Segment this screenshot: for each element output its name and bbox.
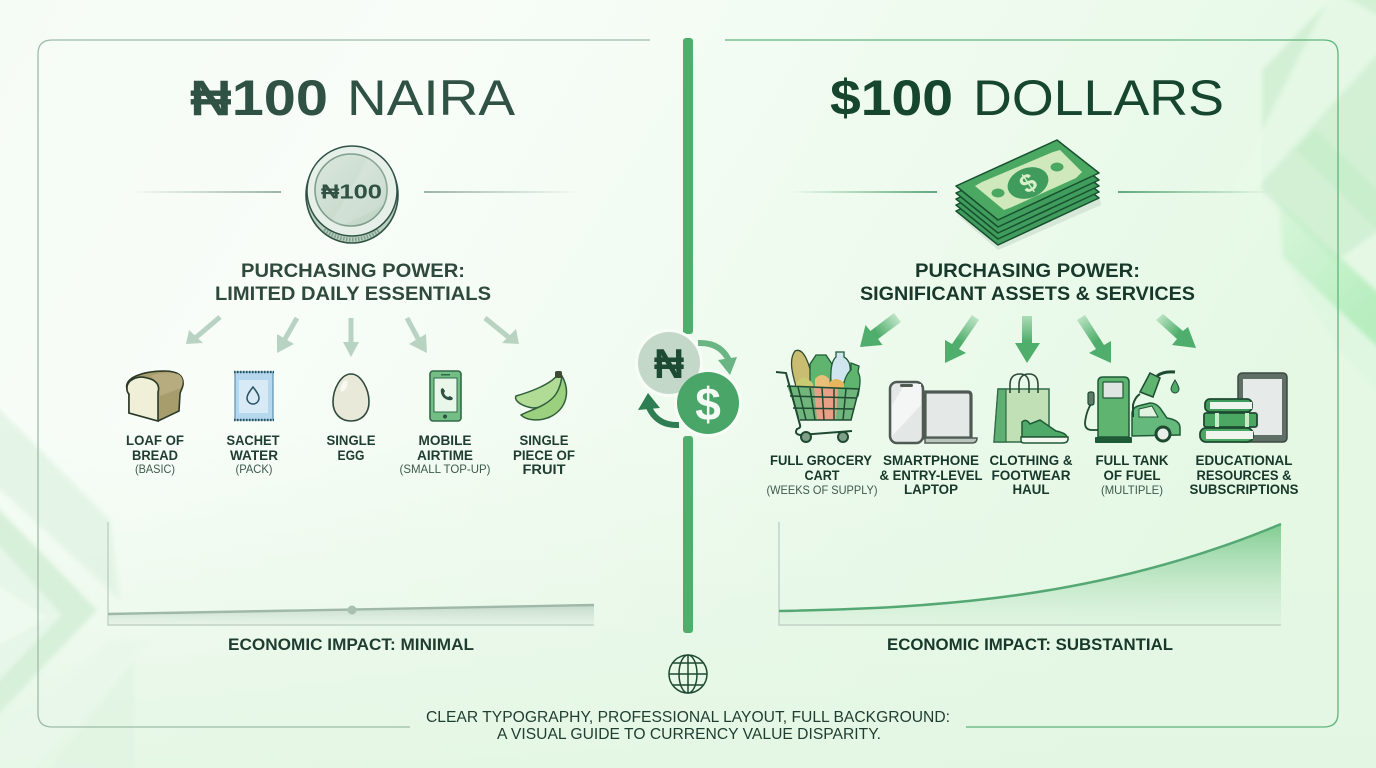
caption: economic impact substantial: ECONOMIC IMPACT: SUBSTANTIAL: [887, 635, 1173, 654]
item: single piece of fruit: [513, 371, 575, 477]
item: full tank of fuel: (MULTIPLE): [1101, 483, 1163, 497]
heading: purchasing power limited: LIMITED DAILY ESSENTIALS: [215, 283, 491, 305]
icon: naira coin: [306, 146, 398, 243]
item: full grocery cart: CART: [804, 468, 840, 483]
panel: dollars: [766, 70, 1298, 654]
item: clothing and footwear: HAUL: [1012, 482, 1050, 497]
panel frame: naira: [38, 40, 650, 727]
item: full grocery cart: (WEEKS OF SUPPLY): [766, 483, 878, 497]
item: loaf of bread: LOAF OF: [126, 433, 184, 448]
item: full tank of fuel: FULL TANK: [1096, 453, 1169, 468]
heading: purchasing power limited: PURCHASING POWER:: [241, 260, 465, 282]
icon: stack of dollar bills: [956, 140, 1101, 250]
item: sachet water: [226, 372, 280, 476]
item: smartphone and laptop: LAPTOP: [904, 482, 958, 497]
icon: currency exchange: ₦: [654, 340, 684, 387]
panel: naira: [108, 70, 594, 654]
footer text: [426, 709, 950, 743]
item: clothing and footwear: CLOTHING &: [990, 453, 1073, 468]
icon: currency exchange: $: [695, 378, 721, 430]
item: single egg: [326, 374, 376, 463]
caption: economic impact minimal: ECONOMIC IMPACT: MINIMAL: [228, 635, 474, 654]
item: full grocery cart: [766, 350, 878, 497]
item: smartphone and laptop: & ENTRY-LEVEL: [880, 468, 982, 483]
item: single piece of fruit: SINGLE: [520, 433, 568, 448]
item: mobile airtime: [400, 371, 490, 476]
item: educational resources: RESOURCES &: [1196, 468, 1292, 483]
coin divider lines: [130, 191, 578, 193]
arrows: naira items: [186, 317, 519, 357]
item: mobile airtime: AIRTIME: [417, 448, 473, 463]
item: single piece of fruit: FRUIT: [522, 462, 566, 477]
icon: stack of dollar bills: $: [1013, 166, 1043, 199]
panel frame: dollars: [725, 40, 1338, 727]
bills divider lines: [790, 191, 1270, 193]
item: smartphone and laptop: [880, 382, 982, 497]
item: single piece of fruit: PIECE OF: [513, 448, 575, 463]
item: smartphone and laptop: SMARTPHONE: [883, 453, 979, 468]
item: loaf of bread: [126, 371, 184, 476]
arrows: dollar items: [860, 313, 1196, 363]
icon: currency exchange: [635, 329, 742, 437]
icon: naira coin: ₦100: [321, 182, 382, 204]
item: full tank of fuel: OF FUEL: [1104, 468, 1160, 483]
item: educational resources: SUBSCRIPTIONS: [1190, 482, 1298, 497]
title: naira: NAIRA: [347, 70, 516, 126]
item: educational resources: [1190, 373, 1298, 497]
item: sachet water: (PACK): [236, 462, 273, 476]
item: educational resources: EDUCATIONAL: [1196, 453, 1292, 468]
item: clothing and footwear: FOOTWEAR: [992, 468, 1071, 483]
footer text: CLEAR TYPOGRAPHY, PROFESSIONAL LAYOUT, FULL BACKGROUND:: [426, 709, 950, 726]
item: full tank of fuel: [1085, 372, 1180, 497]
item: loaf of bread: (BASIC): [135, 462, 175, 476]
title: dollars: [830, 70, 1224, 126]
item: mobile airtime: (SMALL TOP-UP): [400, 462, 490, 476]
item: clothing and footwear: [990, 374, 1073, 497]
item: full grocery cart: FULL GROCERY: [770, 453, 872, 468]
title: naira: ₦100: [190, 70, 328, 126]
central divider: [683, 38, 693, 633]
item: sachet water: SACHET: [226, 433, 280, 448]
title: dollars: $100: [830, 70, 953, 126]
heading: purchasing power significant: PURCHASING POWER:: [915, 260, 1140, 282]
heading: purchasing power significant: [860, 260, 1195, 305]
title: naira: [190, 70, 516, 126]
chart: minimal impact: [108, 522, 594, 625]
item: sachet water: WATER: [230, 448, 278, 463]
icon: globe: [669, 655, 707, 693]
heading: purchasing power significant: SIGNIFICANT ASSETS & SERVICES: [860, 283, 1195, 305]
heading: purchasing power limited: [215, 260, 491, 305]
title: dollars: DOLLARS: [973, 70, 1224, 126]
chart: substantial impact: [779, 522, 1281, 625]
item: single egg: SINGLE: [326, 433, 376, 448]
footer text: A VISUAL GUIDE TO CURRENCY VALUE DISPARITY.: [497, 726, 881, 743]
item: single egg: EGG: [338, 448, 364, 463]
item: loaf of bread: BREAD: [132, 448, 178, 463]
item: mobile airtime: MOBILE: [418, 433, 472, 448]
